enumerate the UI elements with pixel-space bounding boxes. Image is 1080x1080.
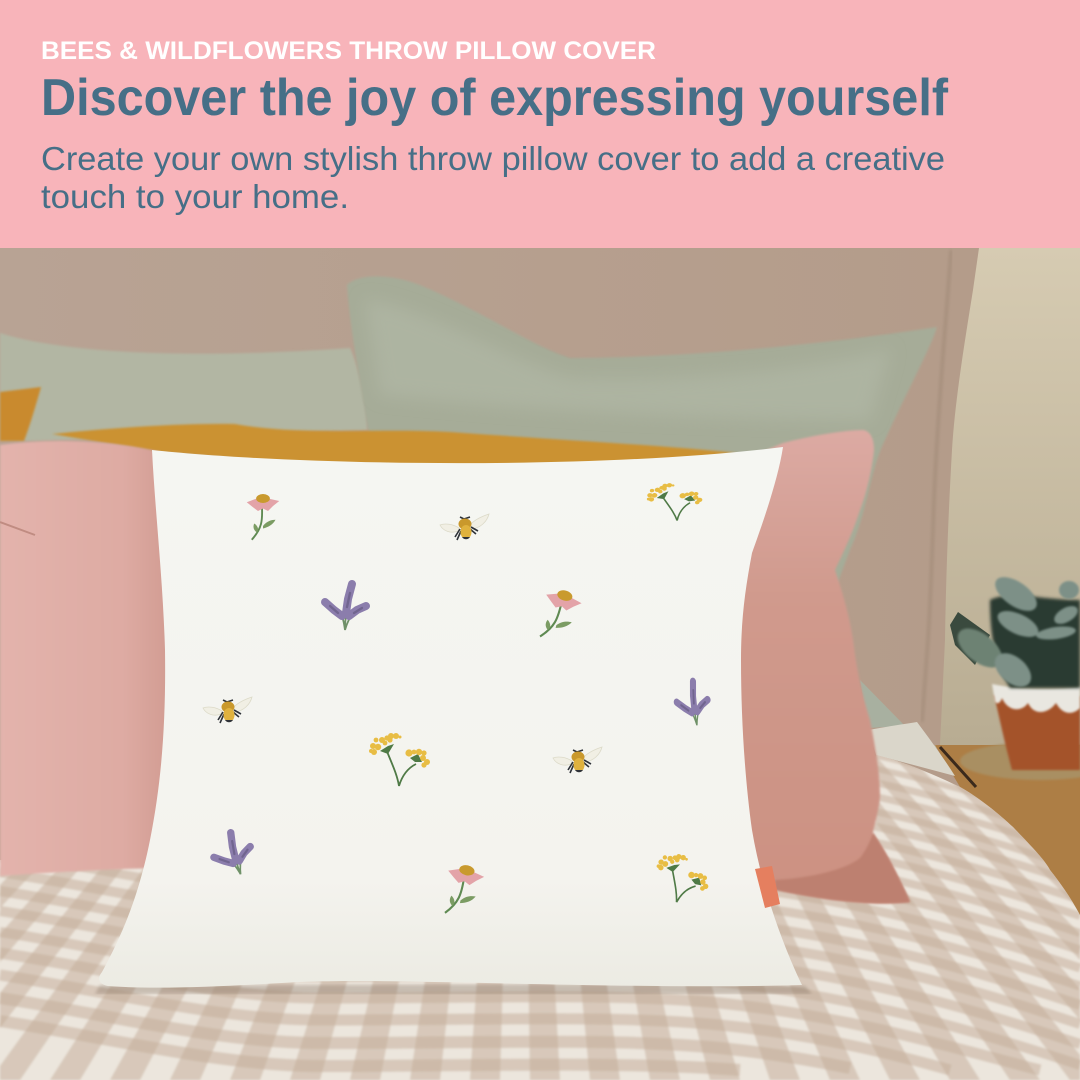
embroidery: coneflower 3 [440, 862, 486, 919]
title: Discover the joy of expressing yourself [41, 69, 949, 127]
gingham duvet [0, 755, 1080, 1080]
embroidery: lavender 2 [673, 679, 712, 728]
mustard corner pillow [0, 387, 41, 441]
sage pillow bottom corner [860, 680, 905, 728]
table edge [940, 747, 976, 787]
right pink pillow flap [775, 833, 910, 903]
embroidery: yarrow 3 [650, 850, 714, 908]
plant pot [992, 684, 1080, 770]
embroidery: lavender 1 [325, 584, 366, 630]
subtitle: Create your own stylish throw pillow cover to add a creative [41, 140, 945, 177]
woven coaster [960, 742, 1080, 780]
fabric tag [755, 866, 780, 908]
embroidery: bee 1 [440, 514, 489, 540]
embroidery: coneflower 2 [535, 586, 584, 645]
sage pillow [347, 276, 937, 590]
header band [0, 0, 1080, 248]
headboard side panel seam [922, 250, 951, 722]
left pink pillow [0, 441, 175, 876]
white embroidered pillow [99, 447, 802, 988]
scene backing [0, 248, 1080, 1080]
small left green pillow [0, 333, 367, 441]
linen sheet [868, 722, 955, 776]
embroidery: coneflower 1 [247, 494, 279, 540]
plant leaves [950, 570, 1080, 693]
sage pillow highlight [365, 300, 890, 420]
left pink pillow crease [0, 522, 35, 535]
subtitle: touch to your home. [41, 178, 349, 215]
wall [900, 248, 1080, 748]
embroidery: bee 2 [203, 697, 252, 723]
bedside table [935, 745, 1080, 920]
embroidery: lavender 3 [208, 828, 259, 881]
right pink pillow [720, 430, 910, 903]
embroidery: yarrow 2 [369, 733, 430, 786]
pillow shadow on duvet [95, 984, 812, 994]
embroidery: bee 3 [553, 747, 602, 773]
headboard [0, 248, 979, 770]
mustard pillow [52, 424, 737, 480]
photo: bed scene [0, 248, 1080, 1080]
embroidery: yarrow 1 [645, 479, 705, 524]
eyebrow: BEES & WILDFLOWERS THROW PILLOW COVER [41, 37, 656, 65]
